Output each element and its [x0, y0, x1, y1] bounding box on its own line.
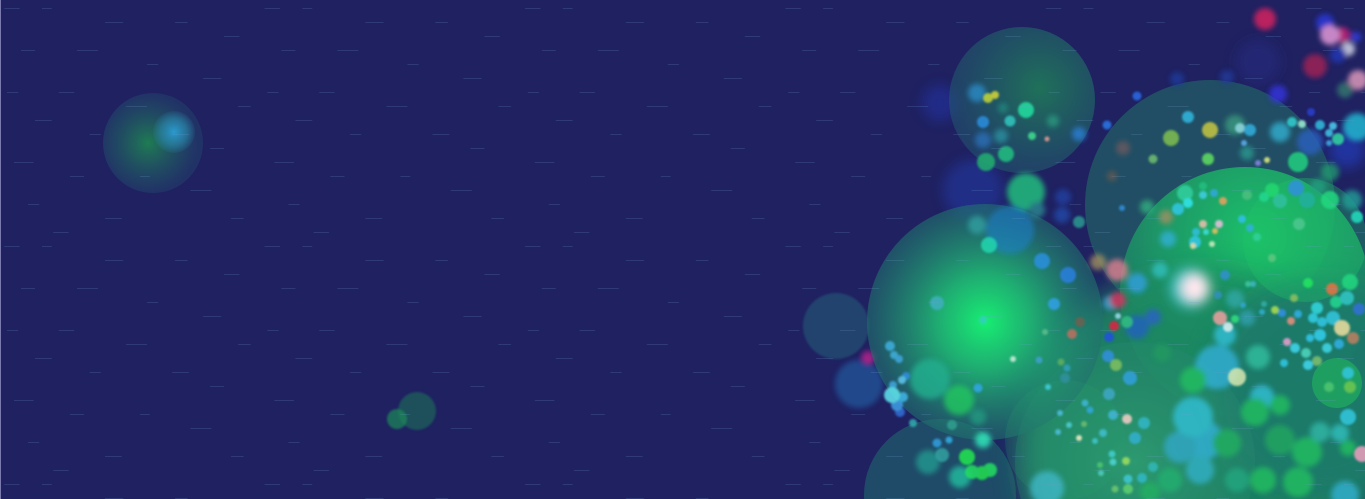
left edge line	[0, 0, 1, 499]
teal sphere and blue sphere left of the cluster	[803, 293, 883, 408]
dark blue haze behind spheres	[922, 40, 1365, 220]
soft blurred bubbles	[910, 8, 1365, 499]
bright flare	[1170, 268, 1210, 308]
crisp small dots	[884, 91, 1365, 494]
large spheres	[864, 27, 1365, 499]
small lower sphere pair	[387, 392, 436, 430]
left sphere with blue highlight	[103, 93, 203, 193]
